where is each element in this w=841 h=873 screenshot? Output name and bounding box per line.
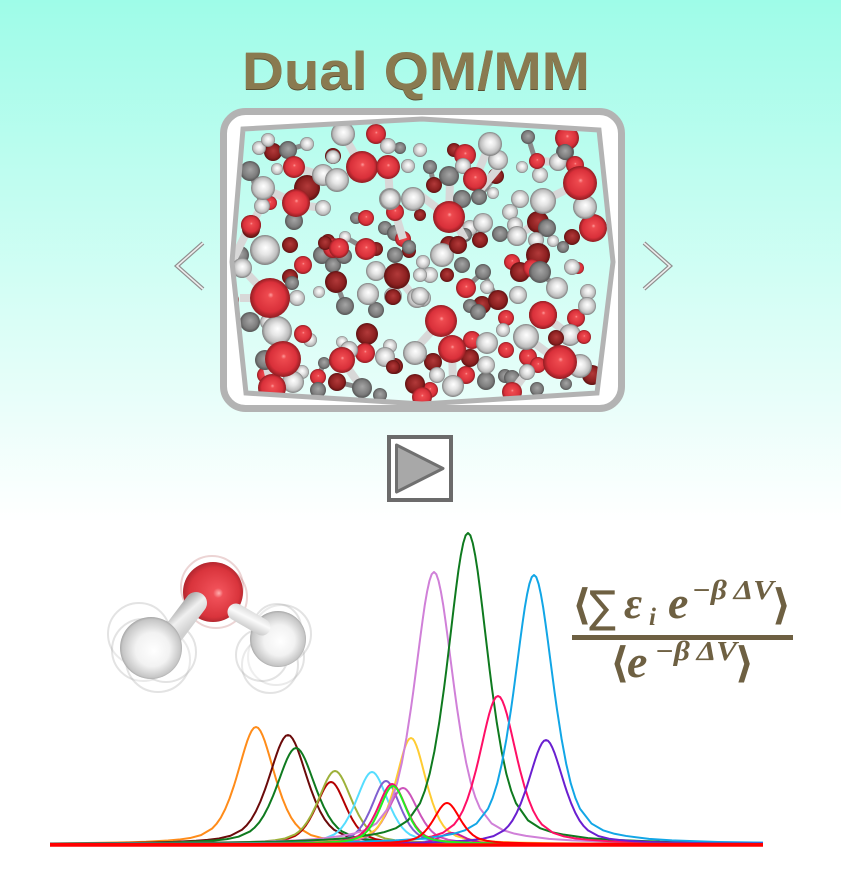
fraction bar <box>572 635 793 640</box>
panel: molecular dynamics simulation window <box>224 112 622 408</box>
denominator: e <box>627 636 647 687</box>
far atoms <box>231 130 602 402</box>
inner barrel outline <box>232 119 613 404</box>
baseline <box>50 843 763 847</box>
arrow: next <box>644 243 670 289</box>
near atoms <box>225 122 607 397</box>
denominator: ⟩ <box>735 638 754 687</box>
numerator: e <box>668 577 688 628</box>
numerator <box>572 575 791 633</box>
title: Dual QM/MM <box>242 42 590 101</box>
water molecules box <box>225 122 607 407</box>
viewport background <box>232 119 613 404</box>
numerator: ε <box>624 579 642 628</box>
denominator <box>610 636 754 687</box>
numerator: i <box>649 604 656 631</box>
numerator: ∑ <box>589 582 616 633</box>
panel frame <box>224 112 622 408</box>
numerator: ⟩ <box>772 580 791 629</box>
denominator: −β ΔV <box>655 636 739 666</box>
icon: play triangle <box>396 445 443 492</box>
formula <box>572 575 793 687</box>
mid atoms <box>241 126 596 407</box>
spectrum peaks chart <box>50 532 763 847</box>
water molecule with motion ghosts <box>108 556 311 693</box>
arrow: previous <box>177 243 203 289</box>
denominator: ⟨ <box>610 638 629 687</box>
play button <box>389 437 451 500</box>
numerator: ⟨ <box>572 580 591 629</box>
numerator: −β ΔV <box>692 575 776 605</box>
